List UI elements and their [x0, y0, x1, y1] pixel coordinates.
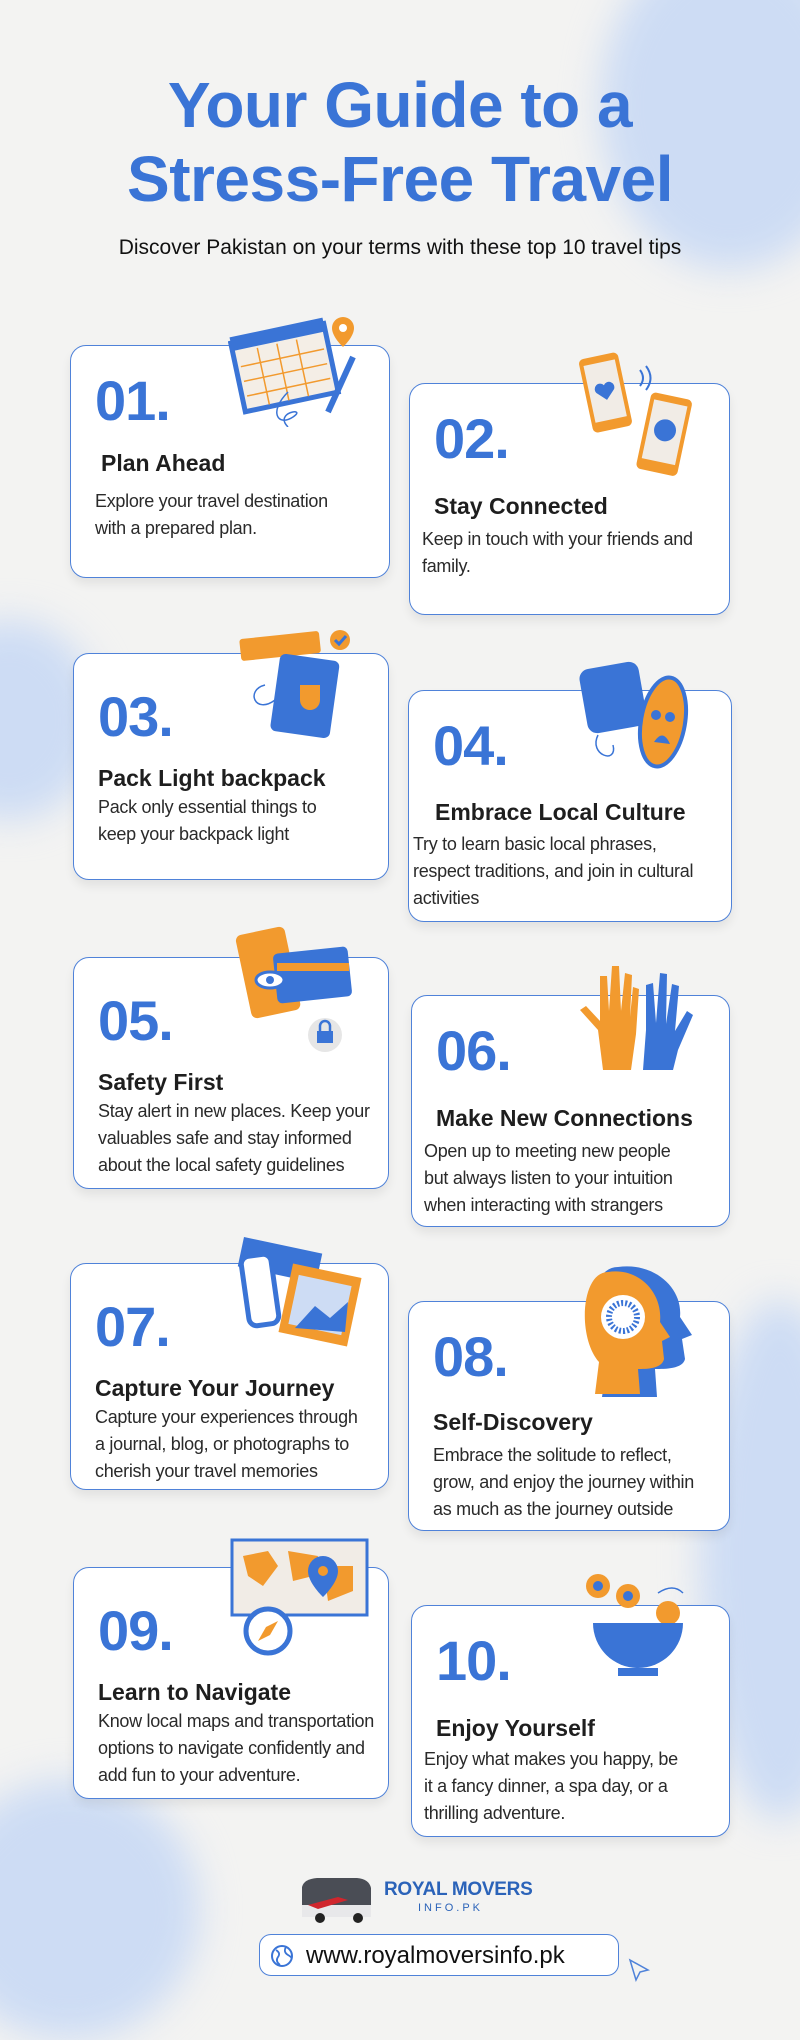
panel: 07 capture your journey: 07.	[95, 1295, 170, 1358]
panel: 03 pack light: Pack Light backpack	[98, 765, 326, 791]
panel: 09 learn to navigate: options to navigate confidently and	[98, 1738, 365, 1758]
panel: 10 enjoy yourself: 10.	[436, 1629, 511, 1692]
panel: 06 make new connections: when interacting with strangers	[424, 1195, 663, 1215]
panel: 05 safety first: 05.	[98, 989, 173, 1052]
panel: 08 self-discovery: 08.	[433, 1325, 508, 1388]
panel: 10 enjoy yourself	[411, 1605, 730, 1837]
title: Your Guide to a	[168, 69, 632, 141]
panel: 01 plan ahead	[70, 345, 390, 578]
panel: 05 safety first: Stay alert in new places. Keep your	[98, 1101, 370, 1121]
url box: www.royalmoversinfo.pk	[306, 1942, 565, 1969]
panel: 04 embrace local culture: activities	[413, 888, 479, 908]
panel: 06 make new connections: Open up to meeting new people	[424, 1141, 670, 1161]
logo: royal movers: ROYAL MOVERS	[384, 1879, 532, 1900]
panel: 07 capture your journey: Capture your experiences through	[95, 1407, 358, 1427]
panel: 08 self-discovery: grow, and enjoy the journey within	[433, 1472, 694, 1492]
panel: 04 embrace local culture: 04.	[433, 714, 508, 777]
panel: 03 pack light: 03.	[98, 685, 173, 748]
icon: phones	[579, 352, 692, 476]
panel: 02 stay connected	[409, 383, 730, 615]
panel: 09 learn to navigate: 09.	[98, 1599, 173, 1662]
panel: 04 embrace local culture: Embrace Local Culture	[435, 799, 686, 825]
panel: 06 make new connections: but always listen to your intuition	[424, 1168, 673, 1188]
icon: masks	[580, 662, 688, 768]
icon: head	[584, 1266, 692, 1397]
logo: royal movers	[302, 1878, 532, 1923]
panel: 02 stay connected: Keep in touch with your friends and	[422, 529, 693, 549]
panel: 07 capture your journey: cherish your travel memories	[95, 1461, 318, 1481]
icon: passport and ticket	[240, 630, 350, 738]
icon: map and compass	[230, 1538, 368, 1656]
panel: 04 embrace local culture	[408, 690, 732, 922]
panel: 03 pack light	[73, 653, 389, 880]
panel: 07 capture your journey: Capture Your Journey	[95, 1375, 334, 1401]
panel: 05 safety first: valuables safe and stay informed	[98, 1128, 352, 1148]
icon: globe	[271, 1945, 293, 1967]
panel: 07 capture your journey	[70, 1263, 389, 1490]
url box	[259, 1934, 619, 1976]
panel: 08 self-discovery	[408, 1301, 730, 1531]
panel: 01 plan ahead: 01.	[95, 369, 170, 432]
panel: 06 make new connections: 06.	[436, 1019, 511, 1082]
icon: phone, card, lock	[236, 926, 352, 1052]
panel: 02 stay connected: Stay Connected	[434, 493, 608, 519]
panel: 05 safety first	[73, 957, 389, 1189]
panel: 04 embrace local culture: Try to learn basic local phrases,	[413, 834, 657, 854]
panel: 08 self-discovery: Embrace the solitude to reflect,	[433, 1445, 672, 1465]
panel: 10 enjoy yourself: Enjoy Yourself	[436, 1715, 595, 1741]
logo: royal movers: INFO.PK	[418, 1902, 483, 1914]
panel: 03 pack light: keep your backpack light	[98, 824, 289, 844]
panel: 01 plan ahead: Plan Ahead	[101, 450, 225, 476]
title: Stress-Free Travel	[127, 143, 673, 215]
icon: bus	[302, 1878, 371, 1923]
panel: 04 embrace local culture: respect traditions, and join in cultural	[413, 861, 693, 881]
subtitle: Discover Pakistan on your terms with these top 10 travel tips	[119, 236, 681, 259]
panel: 09 learn to navigate	[73, 1567, 389, 1799]
panel: 10 enjoy yourself: Enjoy what makes you happy, be	[424, 1749, 678, 1769]
icon: bowl and flowers	[586, 1574, 684, 1676]
panel: 02 stay connected: 02.	[434, 407, 509, 470]
panel: 09 learn to navigate: Know local maps and transportation	[98, 1711, 374, 1731]
panel: 07 capture your journey: a journal, blog, or photographs to	[95, 1434, 349, 1454]
panel: 03 pack light: Pack only essential things to	[98, 797, 316, 817]
panel: 08 self-discovery: Self-Discovery	[433, 1409, 593, 1435]
panel: 10 enjoy yourself: thrilling adventure.	[424, 1803, 565, 1823]
icon: calendar	[228, 317, 356, 427]
panel: 09 learn to navigate: add fun to your adventure.	[98, 1765, 300, 1785]
panel: 01 plan ahead: Explore your travel destination	[95, 491, 328, 511]
icon: hands	[580, 966, 693, 1070]
panel: 05 safety first: Safety First	[98, 1069, 223, 1095]
panel: 05 safety first: about the local safety guidelines	[98, 1155, 344, 1175]
panel: 06 make new connections: Make New Connections	[436, 1105, 693, 1131]
panel: 02 stay connected: family.	[422, 556, 471, 576]
panel: 10 enjoy yourself: it a fancy dinner, a spa day, or a	[424, 1776, 668, 1796]
panel: 09 learn to navigate: Learn to Navigate	[98, 1679, 291, 1705]
panel: 01 plan ahead: with a prepared plan.	[95, 518, 257, 538]
title	[127, 69, 673, 215]
panel: 08 self-discovery: as much as the journey outside	[433, 1499, 673, 1519]
icon: cursor	[628, 1958, 650, 1982]
panel: 06 make new connections	[411, 995, 730, 1227]
icon: film and photo	[238, 1237, 362, 1346]
